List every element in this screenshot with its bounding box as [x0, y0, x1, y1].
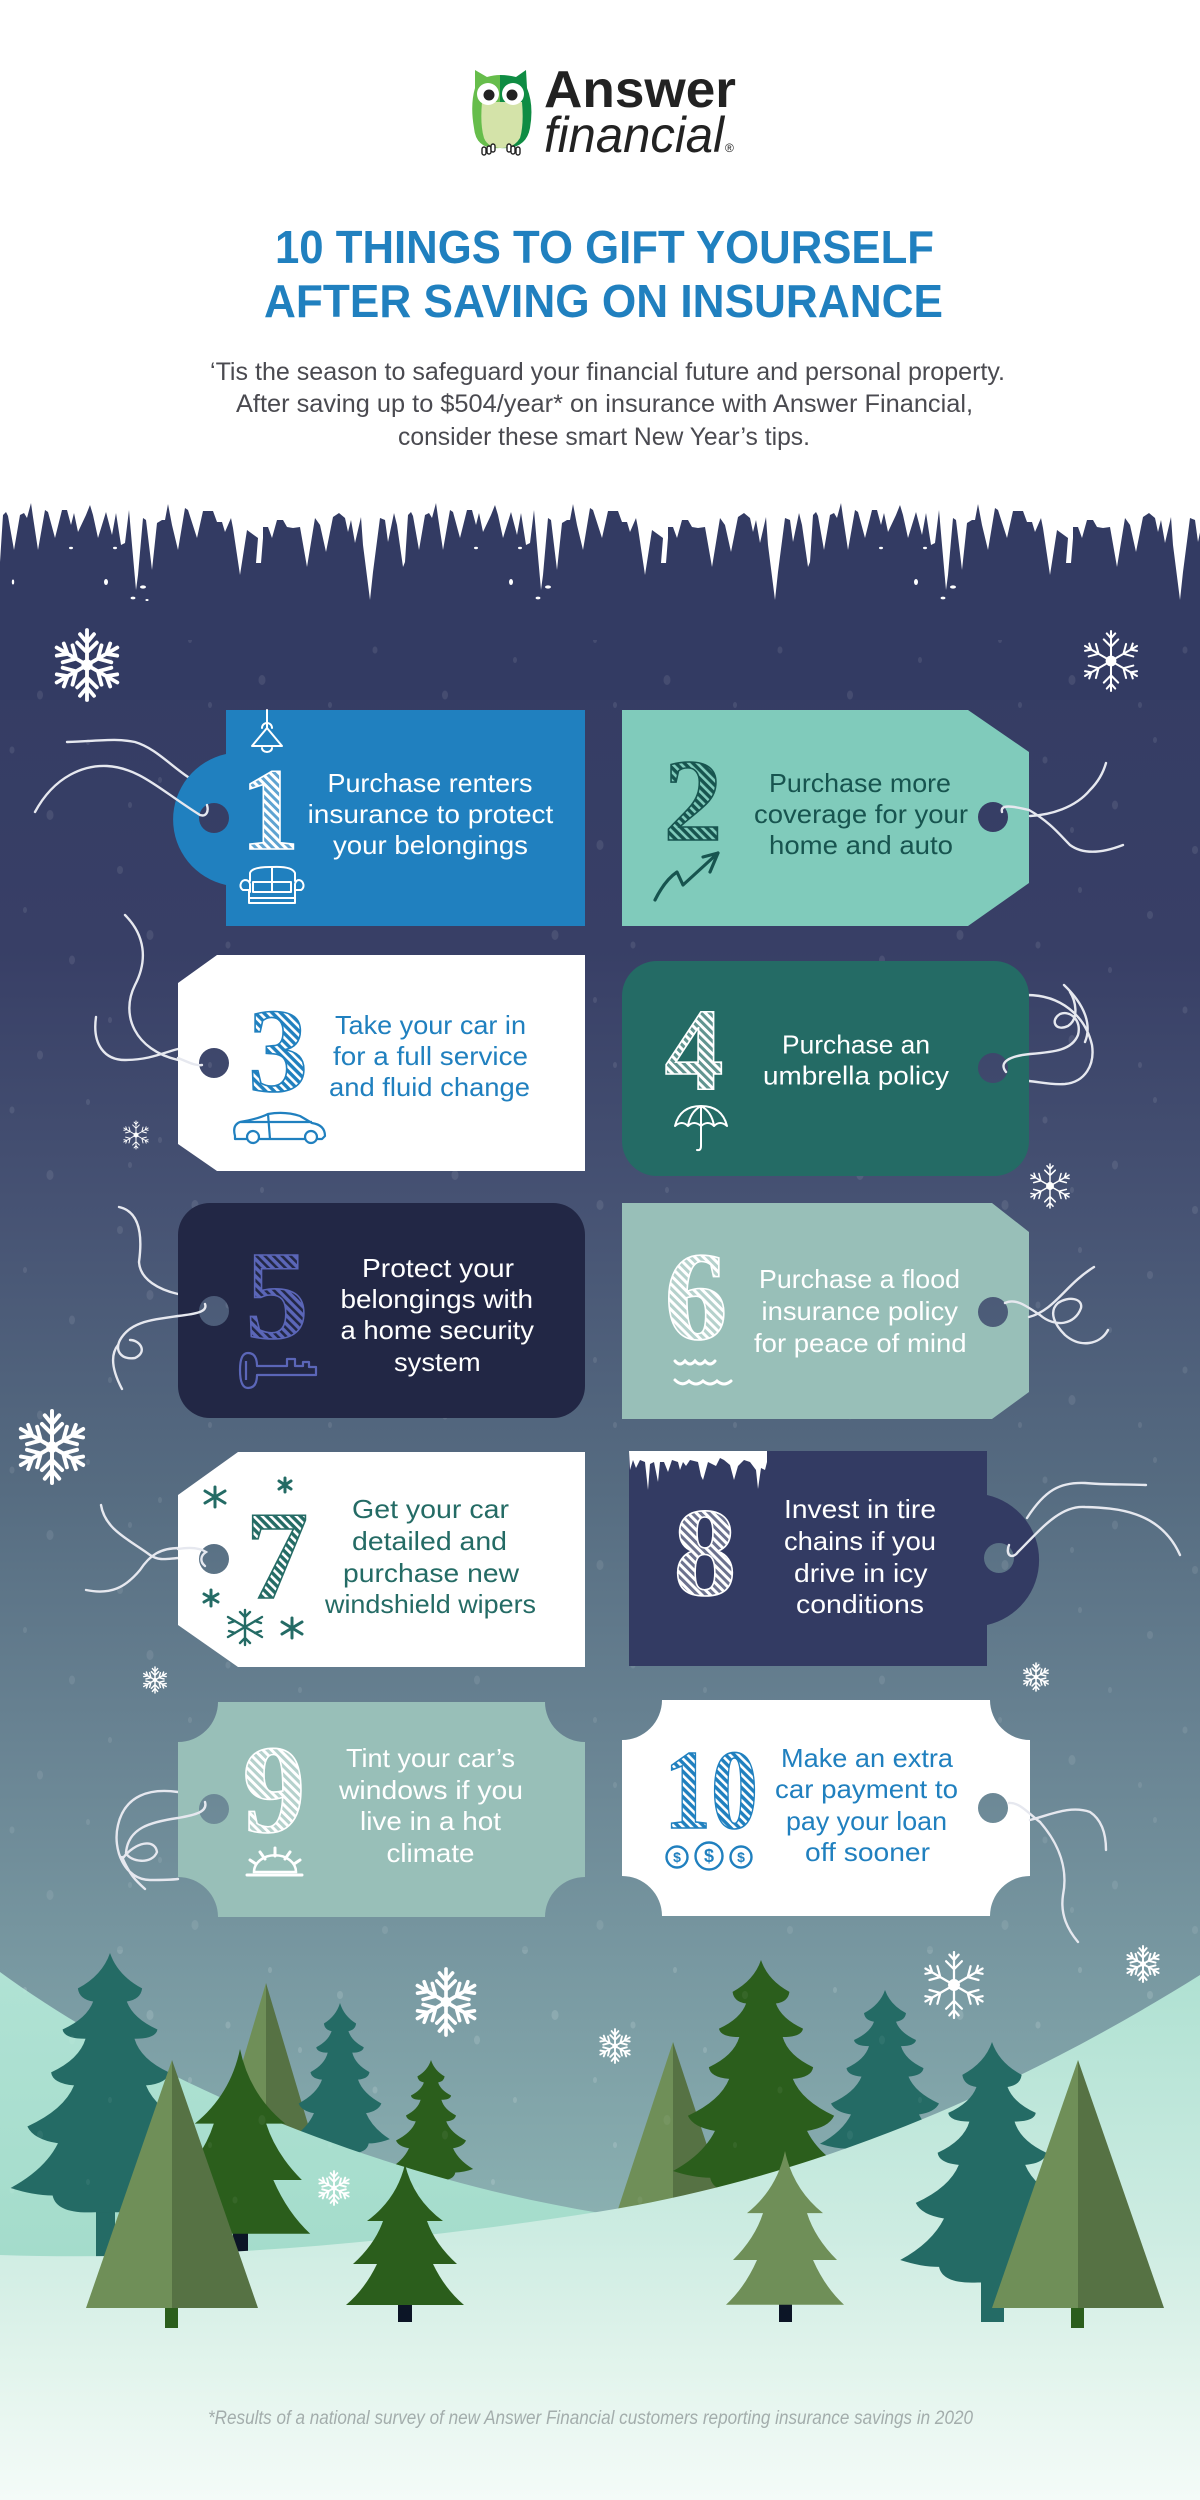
tag 9: window tint — [117, 1702, 585, 1917]
string — [67, 740, 188, 777]
tag shape — [178, 1702, 585, 1917]
icon: coin dollar signs: $ — [704, 1846, 714, 1866]
front tree: dark green center — [346, 2164, 464, 2322]
text — [754, 1264, 967, 1358]
text: Invest in tire — [784, 1494, 936, 1524]
text — [340, 1253, 534, 1377]
tag shape — [178, 1452, 585, 1667]
back tree: olive right — [598, 2042, 748, 2270]
text: home and auto — [769, 830, 953, 860]
tag 3: car service — [95, 915, 585, 1171]
front tree: olive center — [726, 2151, 844, 2322]
tree: dark green left — [170, 2049, 310, 2260]
tag 7: car detailing — [86, 1452, 585, 1667]
icon: coin dollar signs: $ — [737, 1849, 745, 1865]
wordmark: registered mark: ® — [725, 141, 734, 155]
text — [329, 1010, 530, 1102]
text: live in a hot — [360, 1806, 502, 1836]
string behind — [113, 1207, 178, 1389]
strings behind — [86, 1505, 180, 1592]
back tree: teal right — [820, 1990, 950, 2160]
text: Take your car in — [335, 1010, 526, 1040]
number: 10 — [664, 1728, 758, 1853]
back tree: olive left — [194, 1983, 338, 2225]
icon: key — [240, 1353, 316, 1388]
text: Purchase a flood — [759, 1264, 960, 1294]
tag 2: more coverage — [622, 710, 1123, 926]
text: Purchase an — [782, 1030, 930, 1060]
strings — [1009, 1803, 1040, 1822]
icon: coin dollar signs: $ — [673, 1849, 681, 1865]
text: and fluid change — [329, 1072, 530, 1102]
number: 7 — [246, 1487, 308, 1626]
text: car payment to — [775, 1774, 958, 1804]
strings — [1008, 1483, 1180, 1556]
tag shape — [178, 955, 585, 1171]
number: 8 — [674, 1484, 736, 1623]
icon: umbrella — [675, 1106, 727, 1150]
text — [308, 768, 554, 860]
string through hole — [178, 1058, 202, 1065]
strings behind — [117, 1791, 178, 1889]
text: purchase new — [343, 1558, 519, 1588]
tag 10: extra car payment — [622, 1700, 1106, 1942]
tag shape — [178, 1203, 585, 1418]
snow dots — [0, 640, 1200, 2280]
strings — [95, 915, 178, 1060]
icon: water waves — [675, 1361, 731, 1384]
text: windshield wipers — [324, 1589, 536, 1619]
tag shape — [622, 1203, 1029, 1419]
icon: hanging lamp — [252, 710, 282, 752]
tag shape — [622, 961, 1029, 1176]
text: belongings with — [340, 1284, 533, 1314]
title: 10 THINGS TO GIFT YOURSELF — [275, 221, 934, 273]
snowflakes — [16, 630, 1161, 2205]
front snow hill — [0, 1975, 1200, 2500]
left snow hill — [0, 1972, 600, 2300]
text: system — [394, 1347, 481, 1377]
text: coverage for your — [754, 799, 968, 829]
string through hole — [178, 1548, 206, 1566]
icons: snow asterisks — [204, 1478, 302, 1638]
icon: coin dollar signs — [673, 1846, 745, 1866]
intro text: ‘Tis the season to safeguard your financial future and personal property. — [210, 358, 1005, 386]
text: climate — [386, 1838, 474, 1868]
number: 6 — [664, 1228, 728, 1367]
string through hole — [118, 1304, 205, 1358]
night sky background — [0, 600, 1200, 2300]
footnote: *Results of a national survey of new Answer Financial customers reporting insurance savings in 2020 — [208, 2408, 973, 2429]
text: detailed and — [352, 1526, 507, 1556]
text: umbrella policy — [763, 1061, 949, 1091]
front tree: olive left — [86, 2060, 258, 2328]
number: 4 — [664, 984, 724, 1115]
tag shape — [622, 1700, 1030, 1916]
text: insurance to protect — [308, 799, 554, 829]
text — [324, 1494, 536, 1619]
strings — [1002, 763, 1123, 852]
text: for a full service — [333, 1041, 528, 1071]
icon: car — [234, 1113, 325, 1139]
text: a home security — [340, 1315, 534, 1345]
tag 4: umbrella policy — [622, 961, 1093, 1176]
icicle edge — [0, 503, 1200, 700]
text: drive in icy — [794, 1558, 928, 1588]
text — [784, 1494, 936, 1619]
text: Tint your car’s — [346, 1743, 515, 1773]
text — [754, 768, 968, 860]
number: 9 — [242, 1721, 306, 1860]
text: Purchase more — [769, 768, 951, 798]
icon: car wheels — [247, 1131, 317, 1143]
tag shape — [173, 710, 585, 926]
icon: rising arrow — [655, 853, 718, 900]
string through hole — [123, 1802, 205, 1861]
logo — [472, 61, 736, 163]
falling snow over trees — [0, 1950, 1200, 2240]
wordmark: financial: financial — [544, 107, 726, 163]
tree: big teal left — [11, 1953, 209, 2258]
number: 2 — [664, 735, 722, 866]
front tree: big teal right — [900, 2042, 1084, 2322]
tag shape — [622, 710, 1029, 926]
number: 5 — [246, 1227, 308, 1366]
icon: sun on horizon — [247, 1848, 302, 1875]
text: off sooner — [805, 1837, 930, 1867]
text: insurance policy — [762, 1296, 958, 1326]
tag shape — [629, 1451, 1039, 1666]
text: pay your loan — [786, 1806, 947, 1836]
tag 1: renters insurance — [35, 710, 585, 926]
text: Get your car — [352, 1494, 509, 1524]
intro text — [210, 358, 1005, 451]
string through hole — [1003, 992, 1079, 1072]
text: Protect your — [362, 1253, 514, 1283]
tag 6: flood insurance — [622, 1203, 1108, 1419]
back tree: big dark green right — [673, 1960, 849, 2193]
icon: coins — [666, 1842, 752, 1870]
title: AFTER SAVING ON INSURANCE — [264, 275, 943, 327]
text — [763, 1030, 949, 1091]
text: for peace of mind — [754, 1328, 967, 1358]
text — [775, 1743, 958, 1867]
string behind — [1027, 985, 1093, 1084]
icon: couch — [241, 867, 303, 903]
text: your belongings — [333, 830, 528, 860]
wordmark: Answer: Answer — [544, 61, 736, 119]
icon: tag icicles — [629, 1451, 767, 1490]
text: Purchase renters — [328, 768, 532, 798]
text: Make an extra — [781, 1743, 954, 1773]
intro text: After saving up to $504/year* on insurance with Answer Financial, — [236, 390, 973, 418]
text: windows if you — [338, 1775, 523, 1805]
tag 8: tire chains — [629, 1451, 1180, 1666]
icon: owl mascot — [472, 70, 531, 155]
number: 3 — [248, 984, 308, 1117]
text: chains if you — [784, 1526, 936, 1556]
title — [264, 221, 943, 327]
strings — [1005, 1267, 1108, 1343]
back tree: small dark green — [389, 2060, 473, 2180]
intro text: consider these smart New Year’s tips. — [398, 423, 810, 451]
tag 5: home security — [113, 1203, 585, 1418]
text — [338, 1743, 523, 1868]
string through hole — [35, 766, 208, 815]
front tree: olive right — [992, 2060, 1164, 2328]
text: conditions — [796, 1589, 924, 1619]
back tree: teal left — [290, 2003, 390, 2153]
number: 1 — [240, 744, 300, 875]
icon: snowflake — [228, 1610, 262, 1645]
